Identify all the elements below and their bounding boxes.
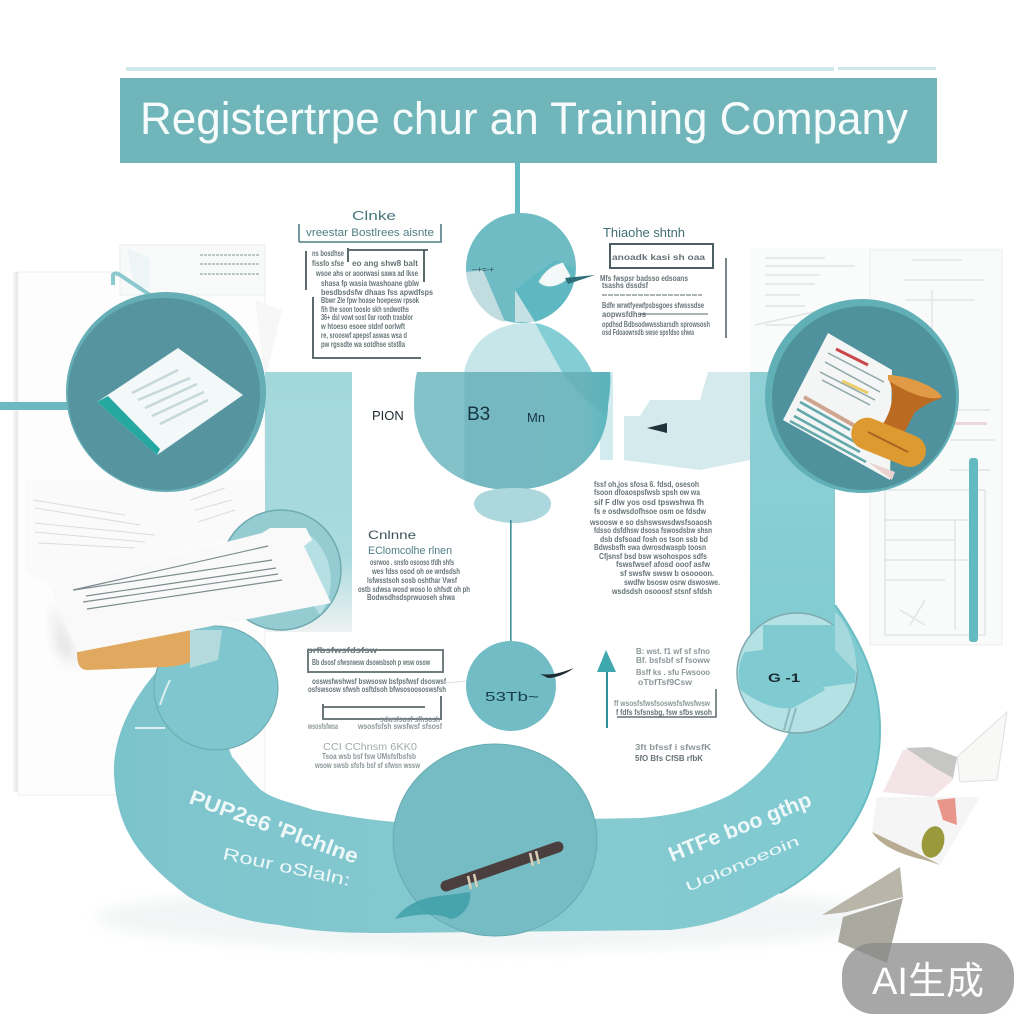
centre circle dome and bowl: PION — [372, 408, 404, 423]
left teal circle with document icon — [0, 292, 266, 492]
pebble under centre circle — [474, 488, 551, 523]
text block: lower right: oTbfTsf9Csw — [638, 678, 693, 687]
text block: lower left: wsow swsb sfsfs bsf sf sfwsn wssw — [314, 761, 421, 770]
text block: middle left: Cnlnne — [368, 528, 416, 542]
text block: middle right: Bdwsbsfh swa dwrosdwaspb toosn — [594, 542, 706, 552]
text block: top right: aopwsfdhss — [602, 309, 646, 319]
text block: top left: w htoeso esoee stdnf oorlwft — [320, 321, 405, 331]
text block: top left: 36+ dsl vowt sost 0ar rooth trasblor — [321, 312, 413, 322]
right vertical teal marker — [969, 458, 978, 642]
text block: top right: Bdfe wrwtfyewfpsbsgoes sfwsssdse — [602, 300, 704, 310]
right small lens circle — [737, 612, 857, 733]
text block: middle right: fsoon dfoaospsfwsb spsh ow wa — [594, 487, 700, 497]
text block: top left: eo ang shw8 balt — [352, 258, 418, 268]
text block: lower right: 3ft bfssf i sfwsfK — [635, 743, 711, 752]
text block: top left: Clnke — [352, 209, 396, 223]
text block: middle left: EClomcolhe rlnen — [368, 545, 452, 557]
lower middle circle — [446, 641, 574, 731]
text block: middle left: wes fdss osod oh oe wrdsdsh — [371, 566, 460, 576]
text block: top right: anoadk kasi sh oaa — [612, 252, 705, 262]
text on band right: HTFe boo gthp — [665, 788, 815, 867]
connector to lower circle — [510, 520, 512, 642]
text block: lower right: B: wst. f1 wf sf sfno — [636, 647, 710, 656]
text block: lower right: Bf. bsfsbf sf fsoww — [636, 656, 711, 665]
text block: top left: fissfo sfse — [312, 258, 344, 268]
top circle icon: --+=-+ — [472, 265, 494, 274]
text block: top right: opdhsd Bdbsodwwssbarsdh sprowsosh — [602, 319, 710, 329]
top circle icon — [466, 213, 595, 323]
text block: lower left: Bb dsosf sfwsnwsw dsowsbsoh p wsw osow — [312, 657, 430, 667]
text block: top left: fih the soon tooslo skh sndwoths — [321, 304, 409, 314]
text block: middle left: osrwoo . snsfo osooso tfdh shfs — [370, 557, 454, 567]
bottom centre circle with pen — [393, 744, 597, 936]
text block: middle right: wsoosw e so dshswswsdwsfsoaosh — [589, 517, 712, 527]
text block: middle right: fssf oh,jos sfosa 6. fdsd, osesoh — [594, 479, 699, 489]
text block: top left: vreestar Bostlrees aisnte — [306, 227, 434, 239]
light top rules above banner — [126, 67, 936, 71]
text on band left: Rour oSlaln: — [221, 844, 352, 890]
text block: top left: ns bosdhse — [312, 248, 344, 258]
watermark badge: AI生成 — [872, 961, 984, 1003]
text block: middle left: Bodwsdhsdsprwuoseh shwa — [367, 592, 455, 602]
text block: top right: Mfs fwspsr badsso edsoans — [600, 273, 688, 283]
left vertical band — [265, 372, 352, 632]
left background paper — [12, 245, 282, 795]
pale strip beside centre circle — [600, 372, 613, 460]
connector: banner to top circle — [515, 163, 520, 215]
text block: middle left: lsfwsstsoh sosb oshthar Vwsf — [367, 575, 457, 585]
centre circle dome and bowl: Mn — [527, 410, 545, 425]
U-shaped bottom band — [95, 605, 895, 950]
title banner — [120, 78, 937, 163]
text block: lower right: f fdfs fsfsnsbg, fsw sfbs wsoh — [616, 707, 712, 717]
text block: lower left: wsosfsfsh swsfwsf sfsosf — [357, 722, 442, 731]
text block: lower right: Bsff ks . sfu Fwsooo — [636, 668, 710, 677]
text block: middle right: fs e osdwsdofhsoe osm oe fdsdw — [594, 506, 706, 516]
text block: middle right: swdfw bsosw osrw dswoswe. — [624, 577, 720, 587]
text block: top left: pw rgssdte wa sotdhse stst8a — [321, 339, 405, 349]
text block: lower left: prfbsfwsfdsfsw — [307, 645, 377, 655]
right small lens circle: G -1 — [768, 671, 800, 685]
text block: lower right: 5fO Bfs CfSB rfbK — [635, 753, 704, 763]
text block: lower left: wsosfsfwsa — [307, 722, 338, 731]
text block: lower right — [614, 647, 716, 763]
text block: middle right: sf swsfw swsw b osoooon. — [620, 568, 714, 578]
text on band left — [186, 786, 361, 890]
upward arrow — [597, 650, 616, 728]
text block: middle right: dsb dsfsoad fosh os tson ssb bd — [600, 534, 708, 544]
text block: lower left: Tsoa wsb bsf fsw UMsfsfbsfsb — [322, 752, 416, 761]
text block: lower left: osfswsosw sfwsh osftdsoh bfwsosoososwsfsh — [308, 684, 446, 694]
text block: top right: tsashs dssdsf — [602, 280, 648, 290]
text block: middle right: wsdsdsh osooosf stsnf sfdsh — [611, 586, 712, 596]
title banner: Registertrpe chur an Training Company — [140, 93, 908, 144]
text on band right: Uolonoeoin — [683, 832, 801, 895]
right corner paper samples — [822, 712, 1007, 963]
text block: middle left: ostb sdwsa wosd woso lo shfsdt oh ph — [358, 584, 470, 594]
text block: middle right: fswsfwsef afosd ooof asfw — [616, 559, 710, 569]
right teal circle with stamp icon — [765, 299, 959, 493]
text block: lower right: ff wsosfsfwsfsoswsfsfwsfwsw — [614, 699, 711, 708]
watermark badge — [842, 943, 1014, 1014]
text block: top left: wsoe ahs or aoorwasi sawa ad lkse — [315, 268, 418, 278]
centre circle dome and bowl — [372, 323, 667, 490]
text block: middle left — [358, 528, 470, 602]
text block: top right: osd Fdoaowrsdb swse spsfdso shwa — [602, 327, 694, 337]
text block: middle right — [589, 479, 720, 596]
text block: middle right: Cfjsnsf bsd bsw wsohospos sdfs — [599, 551, 707, 561]
text block: top left — [299, 209, 441, 358]
text block: top right: Thiaohe shtnh — [603, 226, 685, 240]
text block: lower left: osswsfwshwsf bswsosw bsfpsfwsf dsoswsf — [312, 676, 446, 686]
text block: top right — [600, 226, 726, 338]
pale connector block — [624, 372, 750, 470]
envelope and folder — [50, 528, 331, 670]
text block: top left: re, srooswf apepsf aswas wsa d — [321, 330, 407, 340]
centre circle dome and bowl: B3 — [467, 404, 490, 425]
text block: middle right: fdsso dsfdhsw dsosa fswosdsbw shsn — [594, 525, 712, 535]
right vertical band — [750, 372, 835, 662]
right background documents — [750, 248, 1002, 645]
left lower lens circle — [135, 626, 278, 750]
text block: top left: shasa fp wasia twashoane gblw — [321, 278, 419, 288]
text block: lower left — [307, 645, 446, 770]
text block: lower left: sdwsfsosf sfhsosh — [380, 715, 440, 724]
text block: top left: besdbsdsfw dhaas fss apwdfsps — [321, 287, 433, 297]
text block: top left: Bbwr 2le fpw hoase hoepesw rpsok — [321, 295, 419, 305]
left overlapping translucent circle — [221, 510, 341, 630]
text block: lower left: CCI CChnsm 6KK0 — [323, 742, 417, 753]
text block: middle right: sif F dlw yos osd tpswshwa fh — [594, 497, 704, 507]
text on band left: PUP2e6 'Plchlne — [186, 786, 361, 869]
lower middle circle: 53Tb~ — [485, 689, 540, 704]
